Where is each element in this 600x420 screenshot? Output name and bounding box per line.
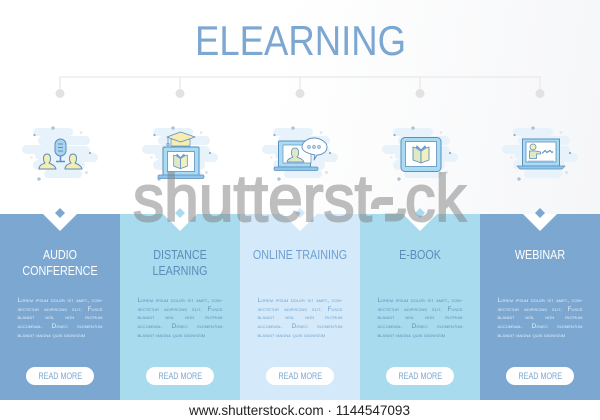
button: READ MORE bbox=[278, 371, 322, 381]
panel: distance learning bbox=[120, 214, 240, 400]
panel: audio conference bbox=[0, 214, 120, 400]
text block: blandit nisl non rutrum bbox=[18, 314, 102, 321]
button bbox=[386, 367, 454, 385]
icon: audio conference bbox=[22, 126, 98, 180]
text block: blandit magna quis dignissim bbox=[378, 332, 445, 339]
text block: blandit nisl non rutrum bbox=[498, 314, 582, 321]
button bbox=[266, 367, 334, 385]
text block: accumsan. Donec elementum bbox=[498, 323, 582, 330]
text block: sectetur adipiscing elit. Fusce bbox=[18, 306, 102, 313]
text block: sectetur adipiscing elit. Fusce bbox=[138, 306, 222, 313]
text block bbox=[498, 297, 582, 339]
heading: E-BOOK bbox=[399, 248, 441, 262]
button: READ MORE bbox=[158, 371, 202, 381]
background bbox=[0, 0, 600, 214]
text block: Lorem ipsum dolor sit amet, con- bbox=[258, 297, 342, 304]
heading: DISTANCE bbox=[153, 248, 207, 262]
text block: Lorem ipsum dolor sit amet, con- bbox=[378, 297, 462, 304]
text block: blandit nisl non rutrum bbox=[138, 314, 222, 321]
button: READ MORE bbox=[398, 371, 442, 381]
text block bbox=[18, 297, 102, 339]
text block: blandit magna quis dignissim bbox=[498, 332, 565, 339]
text block: Lorem ipsum dolor sit amet, con- bbox=[18, 297, 102, 304]
panel: online training bbox=[240, 214, 360, 400]
text block bbox=[138, 297, 222, 339]
text block bbox=[258, 297, 342, 339]
button bbox=[26, 367, 94, 385]
button: READ MORE bbox=[518, 371, 562, 381]
heading: WEBINAR bbox=[515, 248, 565, 262]
text block: Lorem ipsum dolor sit amet, con- bbox=[498, 297, 582, 304]
text block: blandit magna quis dignissim bbox=[18, 332, 85, 339]
heading: CONFERENCE bbox=[22, 264, 98, 278]
panel notches and diamonds bbox=[43, 208, 557, 231]
text block: accumsan. Donec elementum bbox=[138, 323, 222, 330]
text block: accumsan. Donec elementum bbox=[18, 323, 102, 330]
panel: webinar bbox=[480, 214, 600, 400]
footer url: www.shutterstock.com · 1144547093 bbox=[188, 402, 410, 418]
connector tree bbox=[56, 76, 544, 98]
heading: LEARNING bbox=[153, 264, 207, 278]
icon: e-book bbox=[382, 126, 458, 180]
button: READ MORE bbox=[38, 371, 82, 381]
text block bbox=[378, 297, 462, 339]
heading: ONLINE TRAINING bbox=[253, 248, 347, 262]
text block: accumsan. Donec elementum bbox=[378, 323, 462, 330]
heading bbox=[22, 248, 98, 278]
text block: accumsan. Donec elementum bbox=[258, 323, 342, 330]
icon: distance learning bbox=[142, 126, 218, 180]
text block: blandit magna quis dignissim bbox=[258, 332, 325, 339]
heading bbox=[153, 248, 207, 278]
icon: online training bbox=[262, 126, 338, 180]
text block: sectetur adipiscing elit. Fusce bbox=[258, 306, 342, 313]
text block: Lorem ipsum dolor sit amet, con- bbox=[138, 297, 222, 304]
panel: e-book bbox=[360, 214, 480, 400]
button bbox=[146, 367, 214, 385]
text block: sectetur adipiscing elit. Fusce bbox=[498, 306, 582, 313]
text block: sectetur adipiscing elit. Fusce bbox=[378, 306, 462, 313]
icon: webinar bbox=[502, 126, 578, 180]
heading: AUDIO bbox=[43, 248, 77, 262]
text block: blandit magna quis dignissim bbox=[138, 332, 205, 339]
text block: blandit nisl non rutrum bbox=[378, 314, 462, 321]
button bbox=[506, 367, 574, 385]
text block: blandit nisl non rutrum bbox=[258, 314, 342, 321]
